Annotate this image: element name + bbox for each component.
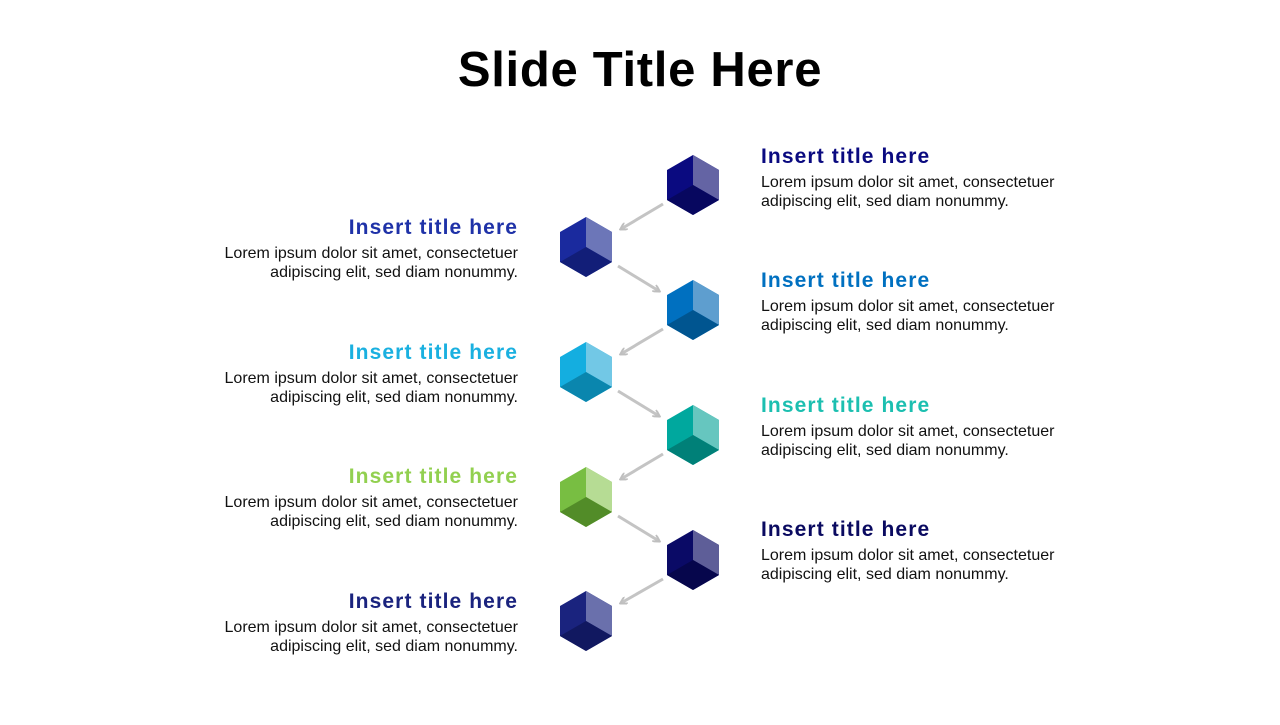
text block 3 [761, 269, 1055, 334]
text block 4: Insert title here [349, 341, 518, 364]
text block 3: adipiscing elit, sed diam nonummy. [761, 317, 1009, 334]
text block 8: Lorem ipsum dolor sit amet, consectetuer [225, 619, 519, 636]
text block 6 [225, 465, 519, 530]
text block 5: adipiscing elit, sed diam nonummy. [761, 442, 1009, 459]
text block 3: Insert title here [761, 269, 930, 292]
text block 1: Insert title here [761, 145, 930, 168]
icon: hexagon 4 [560, 342, 612, 402]
icon: hexagon 3 [667, 280, 719, 340]
icon: hexagon 7 [667, 530, 719, 590]
text block 6: Insert title here [349, 465, 518, 488]
text block 1: Lorem ipsum dolor sit amet, consectetuer [761, 174, 1055, 191]
text block 8: Insert title here [349, 590, 518, 613]
icon: hexagon 6 [560, 467, 612, 527]
icon: hexagon 1 [667, 155, 719, 215]
icon: hexagon 2 [560, 217, 612, 277]
text block 5 [761, 394, 1055, 459]
text block 1 [761, 145, 1055, 210]
text block 5: Lorem ipsum dolor sit amet, consectetuer [761, 423, 1055, 440]
text block 2 [225, 216, 519, 281]
text block 4: adipiscing elit, sed diam nonummy. [270, 389, 518, 406]
text block 3: Lorem ipsum dolor sit amet, consectetuer [761, 298, 1055, 315]
text block 8: adipiscing elit, sed diam nonummy. [270, 638, 518, 655]
text block 1: adipiscing elit, sed diam nonummy. [761, 193, 1009, 210]
text block 4 [225, 341, 519, 406]
text block 2: Lorem ipsum dolor sit amet, consectetuer [225, 245, 519, 262]
text block 6: Lorem ipsum dolor sit amet, consectetuer [225, 494, 519, 511]
text block 7: Insert title here [761, 518, 930, 541]
icon: hexagon 8 [560, 591, 612, 651]
title: Slide Title Here [458, 43, 822, 97]
icon: hexagon 5 [667, 405, 719, 465]
text block 5: Insert title here [761, 394, 930, 417]
text block 7 [761, 518, 1055, 583]
text block 8 [225, 590, 519, 655]
arrows [618, 204, 663, 603]
text block 7: adipiscing elit, sed diam nonummy. [761, 566, 1009, 583]
text block 2: adipiscing elit, sed diam nonummy. [270, 264, 518, 281]
text block 7: Lorem ipsum dolor sit amet, consectetuer [761, 547, 1055, 564]
text block 6: adipiscing elit, sed diam nonummy. [270, 513, 518, 530]
text block 4: Lorem ipsum dolor sit amet, consectetuer [225, 370, 519, 387]
text block 2: Insert title here [349, 216, 518, 239]
